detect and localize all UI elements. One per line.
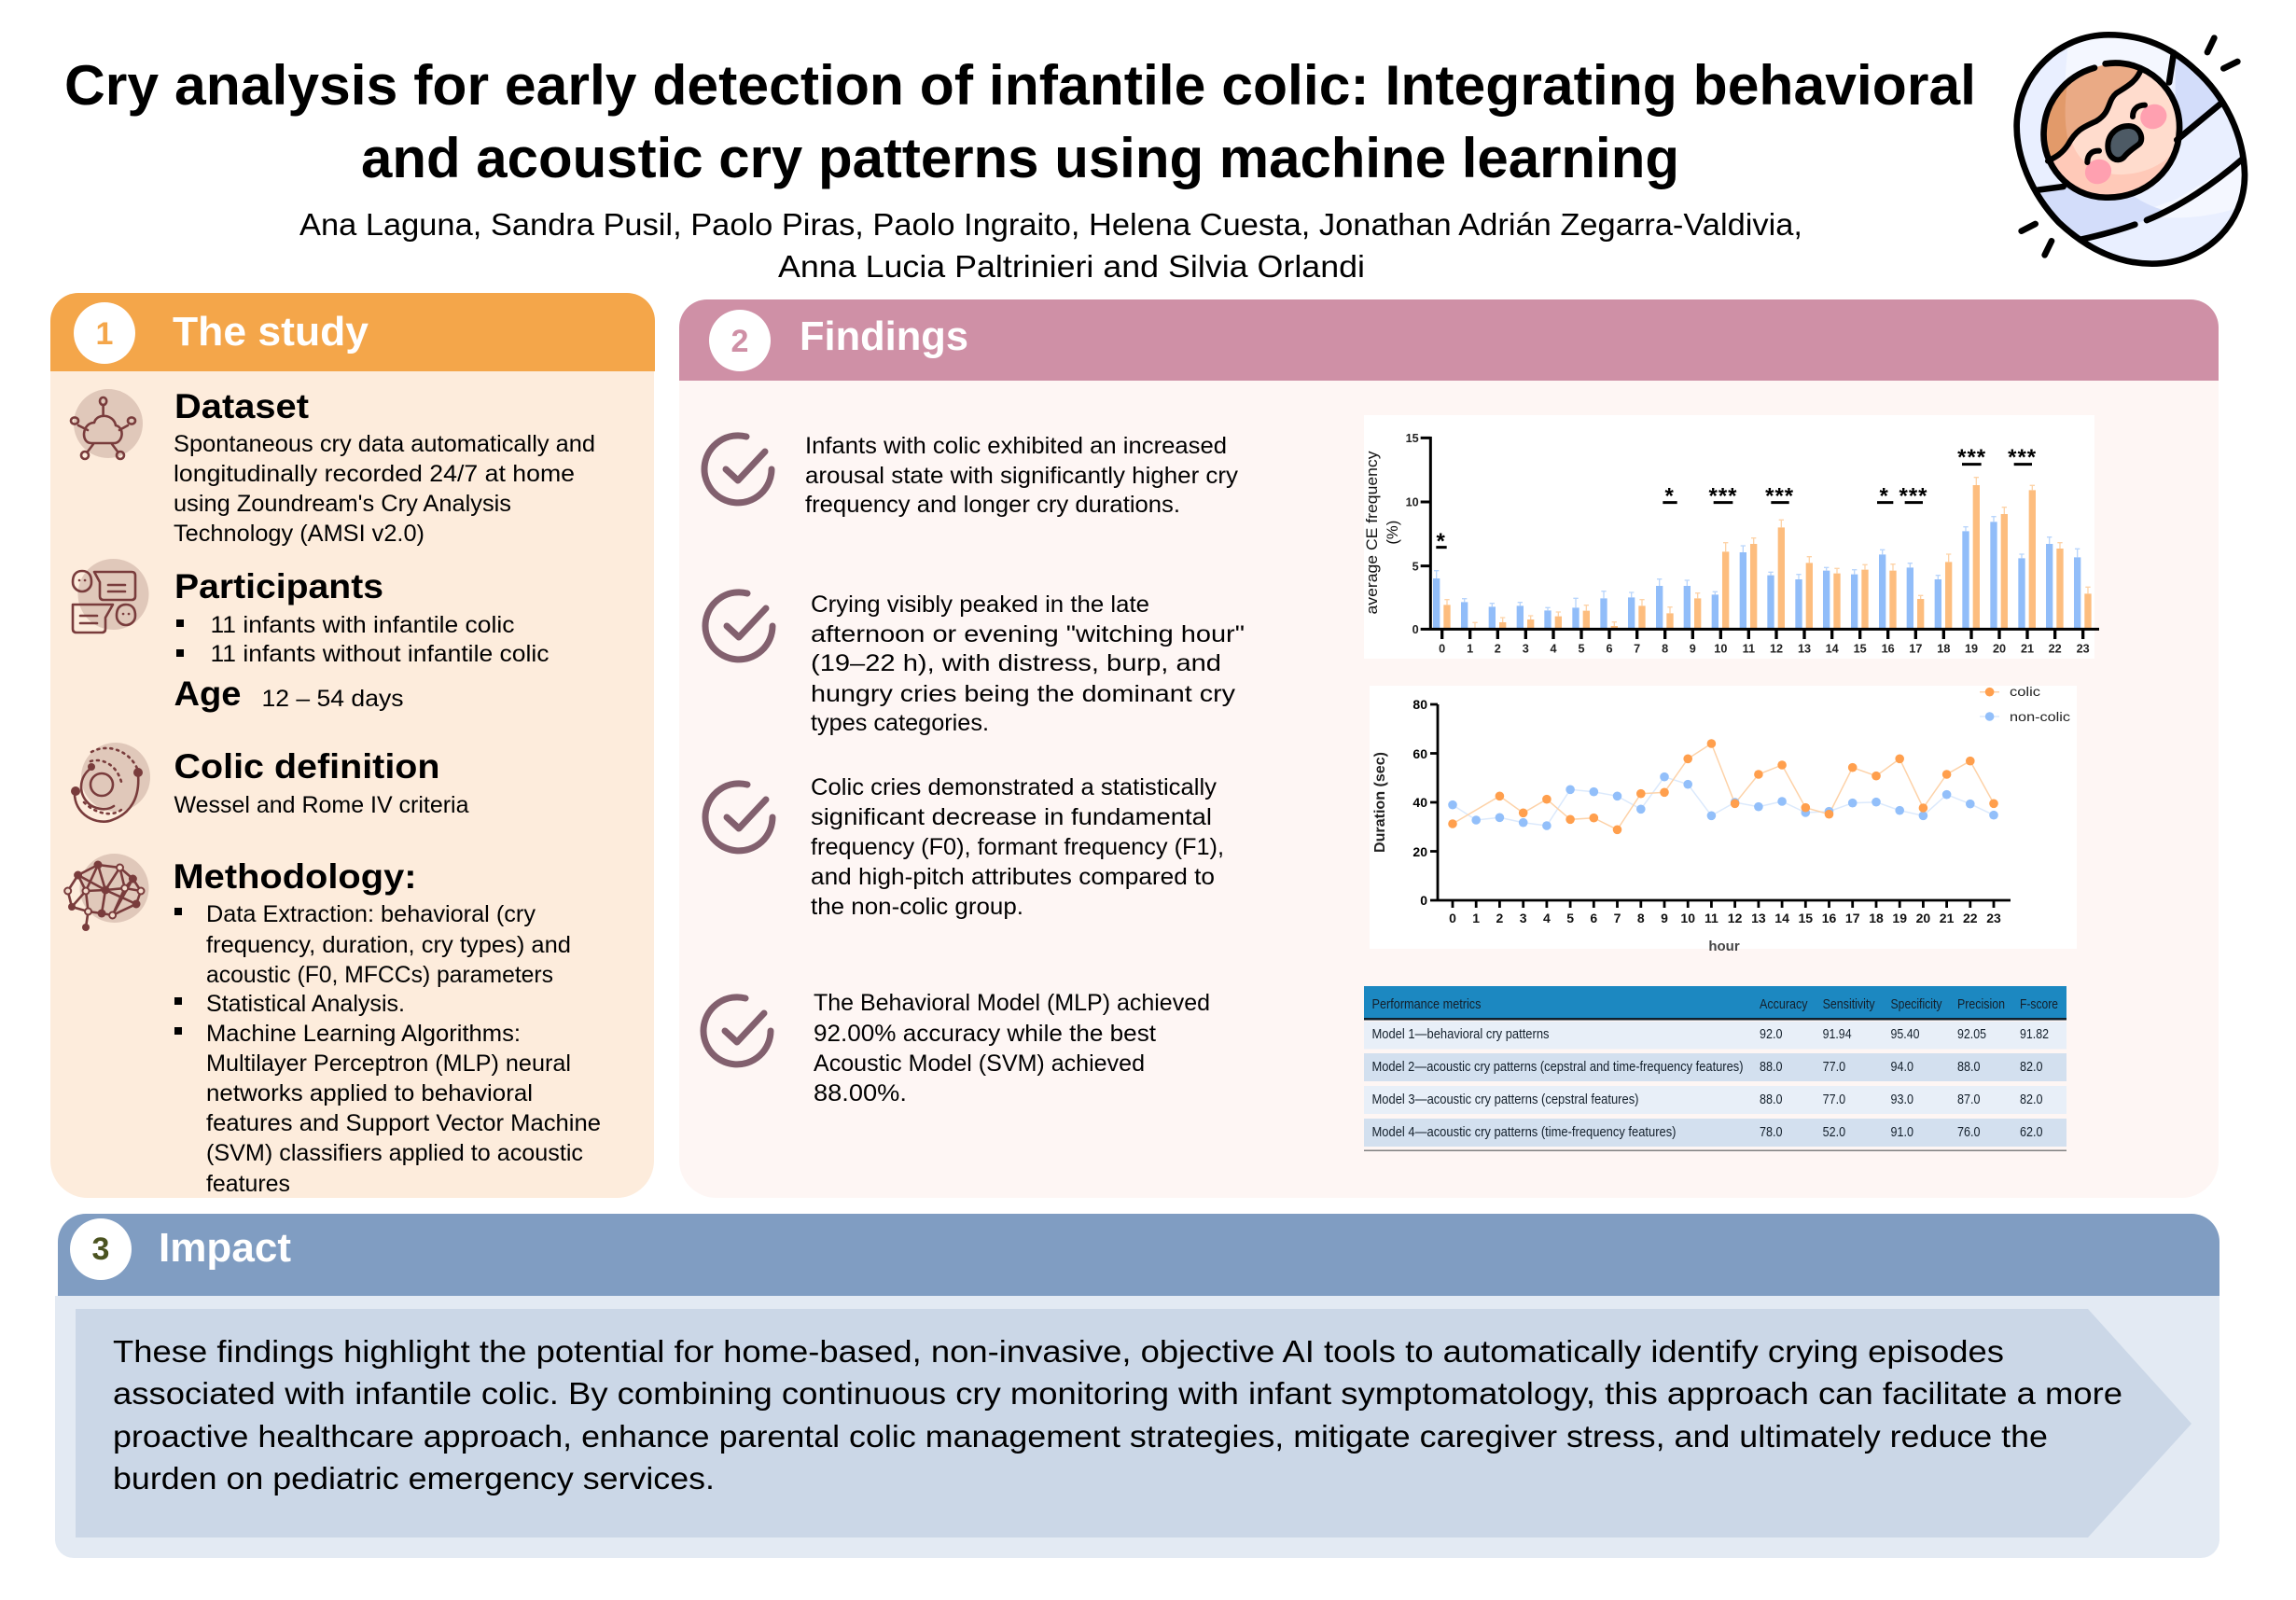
table header: Sensitivity bbox=[1823, 997, 1875, 1012]
text: dataset description: using Zoundream's Cry Analysis bbox=[174, 491, 511, 517]
header: findings: 2 bbox=[731, 324, 748, 359]
icon: check 1 bbox=[704, 436, 772, 503]
list: participants bbox=[176, 612, 549, 667]
text: impact statement: associated with infantile colic. By combining continuous cry monitoring with infant symptomatology, this approach can facilitate a more bbox=[113, 1376, 2122, 1411]
y axis labels: 0 bbox=[1420, 893, 1427, 908]
header: the study: The study bbox=[173, 309, 369, 355]
text: finding 4: Acoustic Model (SVM) achieved bbox=[814, 1050, 1145, 1077]
list: methodology steps: Machine Learning Algorithms: bbox=[206, 1021, 521, 1047]
text: finding 3: the non-colic group. bbox=[811, 894, 1023, 920]
text: finding 2 bbox=[811, 591, 1245, 736]
table row: model 1: 91.94 bbox=[1823, 1027, 1852, 1042]
list: methodology steps: Multilayer Perceptron (MLP) neural bbox=[206, 1050, 571, 1077]
table header: Specificity bbox=[1890, 997, 1942, 1012]
header: the study: 1 bbox=[96, 316, 113, 352]
text: finding 3: significant decrease in fundamental bbox=[811, 804, 1212, 830]
text: finding 3: and high-pitch attributes compared to bbox=[811, 864, 1215, 890]
text: dataset description: Spontaneous cry data automatically and bbox=[174, 431, 595, 457]
header: impact bbox=[58, 1214, 2219, 1296]
x axis labels: 17 bbox=[1845, 911, 1860, 925]
x axis labels: 6 bbox=[1590, 911, 1597, 925]
x axis labels: 21 bbox=[1940, 911, 1955, 925]
header: the study bbox=[50, 293, 655, 371]
x axis labels: 2 bbox=[1496, 911, 1504, 925]
x axis labels: 2 bbox=[1495, 643, 1501, 656]
x axis labels: 19 bbox=[1965, 643, 1978, 656]
table row: model 1: 95.40 bbox=[1890, 1027, 1920, 1042]
x axis labels: 18 bbox=[1869, 911, 1884, 925]
text: dataset description: Technology (AMSI v2.0) bbox=[174, 521, 424, 547]
x axis labels: 15 bbox=[1799, 911, 1813, 925]
table row: model 3: 93.0 bbox=[1890, 1092, 1913, 1107]
authors bbox=[299, 207, 1802, 284]
list: methodology steps: Data Extraction: behavioral (cry bbox=[206, 901, 536, 927]
text: colic criteria: Wessel and Rome IV criteria bbox=[174, 792, 469, 818]
icon: participants bbox=[73, 559, 149, 633]
heading: age: Age bbox=[174, 675, 241, 713]
x axis labels: 21 bbox=[2021, 643, 2034, 656]
x axis labels: 22 bbox=[2049, 643, 2062, 656]
table row: model 4: 76.0 bbox=[1957, 1125, 1980, 1140]
table row: model 1: 92.05 bbox=[1957, 1027, 1986, 1042]
x axis labels: 0 bbox=[1439, 643, 1445, 656]
x axis labels: 16 bbox=[1822, 911, 1836, 925]
x axis labels: 18 bbox=[1937, 643, 1950, 656]
panel: the study bbox=[50, 293, 655, 1198]
y axis labels bbox=[1406, 432, 1419, 636]
x axis labels: 3 bbox=[1520, 911, 1527, 925]
icon: swaddled crying baby bbox=[2017, 35, 2248, 264]
title bbox=[64, 54, 1976, 189]
x axis labels: 5 bbox=[1578, 643, 1585, 656]
y axis labels: 10 bbox=[1406, 496, 1419, 509]
text: finding 3 bbox=[811, 774, 1224, 920]
table header: F-score bbox=[2020, 997, 2058, 1012]
significance markers: *** bbox=[1708, 483, 1738, 508]
heading: methodology: Methodology: bbox=[174, 857, 416, 896]
x axis labels: 3 bbox=[1523, 643, 1529, 656]
x axis labels: 10 bbox=[1714, 643, 1727, 656]
table row: model 3: 82.0 bbox=[2020, 1092, 2043, 1107]
x axis labels: 22 bbox=[1963, 911, 1978, 925]
icon: check 4 bbox=[703, 997, 771, 1064]
table row: model 2: 94.0 bbox=[1890, 1060, 1913, 1075]
table row: model 2: Model 2—acoustic cry patterns (cepstral and time-frequency features) bbox=[1371, 1060, 1743, 1075]
authors: Anna Lucia Paltrinieri and Silvia Orlandi bbox=[778, 249, 1365, 284]
text: finding 4: 92.00% accuracy while the best bbox=[814, 1021, 1156, 1047]
list: methodology steps: Statistical Analysis. bbox=[206, 991, 405, 1017]
table row: model 4: 52.0 bbox=[1823, 1125, 1845, 1140]
table row: model 3: 77.0 bbox=[1823, 1092, 1845, 1107]
x axis title: hour bbox=[1708, 939, 1740, 954]
title: and acoustic cry patterns using machine learning bbox=[361, 127, 1679, 189]
x axis labels: 8 bbox=[1662, 643, 1668, 656]
significance markers: * bbox=[1879, 483, 1889, 508]
x axis labels: 6 bbox=[1606, 643, 1613, 656]
y axis title: (%) bbox=[1384, 521, 1401, 545]
list: methodology steps bbox=[174, 901, 601, 1197]
y axis labels: 20 bbox=[1412, 844, 1427, 859]
list: methodology steps: features bbox=[206, 1171, 290, 1197]
header: findings bbox=[679, 299, 2219, 381]
header: impact: Impact bbox=[159, 1225, 291, 1271]
significance markers: *** bbox=[1899, 483, 1928, 508]
x axis labels: 20 bbox=[1916, 911, 1930, 925]
y axis labels: 80 bbox=[1412, 697, 1427, 712]
x axis labels: 20 bbox=[1993, 643, 2006, 656]
x axis labels: 10 bbox=[1680, 911, 1695, 925]
text: finding 3: Colic cries demonstrated a statistically bbox=[811, 774, 1217, 800]
table row: model 1 bbox=[1364, 1022, 2066, 1049]
list: methodology steps: networks applied to behavioral bbox=[206, 1080, 533, 1106]
x axis labels: 9 bbox=[1661, 911, 1668, 925]
line: colic bbox=[1453, 744, 1994, 829]
x axis labels: 7 bbox=[1634, 643, 1640, 656]
text: finding 2: types categories. bbox=[811, 710, 989, 736]
panel: impact bbox=[55, 1214, 2219, 1558]
icon: check 2 bbox=[705, 592, 772, 660]
x axis labels: 9 bbox=[1690, 643, 1696, 656]
table row: model 2: 88.0 bbox=[1957, 1060, 1980, 1075]
error bars: colic bbox=[1444, 478, 2091, 629]
significance markers: *** bbox=[1957, 445, 1986, 470]
table row: model 1: 92.0 bbox=[1760, 1027, 1782, 1042]
table row: model 3: Model 3—acoustic cry patterns (cepstral features) bbox=[1371, 1092, 1638, 1107]
table header: Precision bbox=[1957, 997, 2005, 1012]
legend: colic bbox=[2010, 684, 2040, 699]
x axis labels: 14 bbox=[1774, 911, 1789, 925]
icon: dataset cloud network bbox=[71, 389, 143, 459]
legend: non-colic bbox=[2010, 709, 2070, 724]
y axis labels: 40 bbox=[1412, 795, 1427, 810]
x axis labels: 7 bbox=[1614, 911, 1621, 925]
text: finding 1: Infants with colic exhibited an increased bbox=[805, 433, 1227, 459]
table row: model 3 bbox=[1364, 1086, 2066, 1114]
bars: non-colic bbox=[1433, 522, 2080, 629]
table row: model 1: Model 1—behavioral cry patterns bbox=[1371, 1027, 1549, 1042]
markers: colic bbox=[1448, 739, 1998, 834]
y axis labels: 60 bbox=[1412, 746, 1427, 761]
table row: model 4: 91.0 bbox=[1890, 1125, 1913, 1140]
x axis labels: 13 bbox=[1798, 643, 1811, 656]
heading: participants: Participants bbox=[174, 567, 383, 605]
x axis labels: 5 bbox=[1566, 911, 1574, 925]
list: methodology steps: frequency, duration, cry types) and bbox=[206, 932, 571, 958]
table row: model 4: Model 4—acoustic cry patterns (time-frequency features) bbox=[1371, 1125, 1676, 1140]
x axis labels: 1 bbox=[1467, 643, 1473, 656]
y axis title bbox=[1363, 451, 1401, 614]
authors: Ana Laguna, Sandra Pusil, Paolo Piras, Paolo Ingraito, Helena Cuesta, Jonathan Adrián Zegarra-Valdivia, bbox=[299, 207, 1802, 242]
x axis labels: 11 bbox=[1743, 643, 1755, 656]
table row: model 1: 91.82 bbox=[2020, 1027, 2049, 1042]
y axis labels: 0 bbox=[1412, 623, 1419, 636]
table row: model 2: 82.0 bbox=[2020, 1060, 2043, 1075]
line: non-colic bbox=[1453, 777, 1994, 826]
bars: colic bbox=[1443, 485, 2092, 629]
y axis labels: 15 bbox=[1406, 432, 1419, 445]
text: finding 1: frequency and longer cry durations. bbox=[805, 492, 1180, 518]
table row: model 2 bbox=[1364, 1053, 2066, 1081]
text: impact statement: These findings highlight the potential for home-based, non-invasive, objective AI tools to automatically identify crying episodes bbox=[113, 1334, 2004, 1369]
significance markers: *** bbox=[2008, 445, 2037, 470]
table row: model 4: 78.0 bbox=[1760, 1125, 1782, 1140]
panel: findings bbox=[679, 299, 2219, 1198]
x axis labels: 23 bbox=[1986, 911, 2001, 925]
text: finding 2: hungry cries being the dominant cry bbox=[811, 681, 1236, 707]
icon: brain network bbox=[64, 854, 149, 931]
text: finding 4 bbox=[814, 990, 1210, 1106]
text: finding 1 bbox=[805, 433, 1239, 518]
title: Cry analysis for early detection of infantile colic: Integrating behavioral bbox=[64, 54, 1976, 117]
x axis labels: 17 bbox=[1909, 643, 1922, 656]
table header bbox=[1364, 986, 2066, 1021]
text: finding 3: frequency (F0), formant frequency (F1), bbox=[811, 834, 1224, 860]
text: finding 2: (19–22 h), with distress, burp, and bbox=[811, 650, 1221, 676]
text: finding 1: arousal state with significantly higher cry bbox=[805, 463, 1239, 489]
x axis labels: 13 bbox=[1751, 911, 1766, 925]
x axis labels: 8 bbox=[1637, 911, 1645, 925]
axes bbox=[1430, 704, 2011, 908]
table row: model 3: 88.0 bbox=[1760, 1092, 1782, 1107]
heading: dataset: Dataset bbox=[174, 387, 309, 425]
markers: non-colic bbox=[1448, 772, 1998, 830]
heading: colic definition: Colic definition bbox=[174, 747, 440, 786]
list: methodology steps: (SVM) classifiers applied to acoustic bbox=[206, 1140, 583, 1166]
significance markers: *** bbox=[1765, 483, 1794, 508]
table row: model 2: 77.0 bbox=[1823, 1060, 1845, 1075]
text: impact statement bbox=[113, 1334, 2122, 1496]
table row: model 2: 88.0 bbox=[1760, 1060, 1782, 1075]
x axis labels: 15 bbox=[1854, 643, 1867, 656]
list: participants: 11 infants with infantile colic bbox=[211, 612, 515, 638]
axes bbox=[1421, 437, 2099, 629]
error bars: non-colic bbox=[1434, 517, 2080, 610]
table header: Performance metrics bbox=[1371, 997, 1482, 1012]
text: finding 4: The Behavioral Model (MLP) achieved bbox=[814, 990, 1210, 1016]
y axis title: Duration (sec) bbox=[1372, 752, 1388, 853]
x axis labels: 16 bbox=[1882, 643, 1895, 656]
list: methodology steps: acoustic (F0, MFCCs) parameters bbox=[206, 962, 553, 988]
significance markers: * bbox=[1664, 483, 1675, 508]
text: dataset description: longitudinally recorded 24/7 at home bbox=[174, 461, 575, 487]
table row: model 4 bbox=[1364, 1119, 2066, 1147]
x axis labels bbox=[1439, 643, 2090, 656]
header: impact: 3 bbox=[92, 1231, 109, 1267]
line chart: cry duration by hour bbox=[1370, 684, 2077, 954]
text: finding 4: 88.00%. bbox=[814, 1080, 907, 1106]
x axis labels: 4 bbox=[1550, 643, 1557, 656]
significance markers bbox=[1436, 445, 2037, 554]
text: finding 2: Crying visibly peaked in the late bbox=[811, 591, 1149, 618]
x axis labels: 12 bbox=[1728, 911, 1743, 925]
x axis labels: 12 bbox=[1770, 643, 1783, 656]
list: methodology steps: features and Support Vector Machine bbox=[206, 1110, 601, 1136]
icon: colic definition cycle bbox=[71, 743, 150, 822]
text: impact statement: burden on pediatric emergency services. bbox=[113, 1461, 715, 1496]
bar chart: average CE frequency by hour bbox=[1363, 415, 2099, 659]
x axis labels: 19 bbox=[1892, 911, 1907, 925]
text: impact statement: proactive healthcare approach, enhance parental colic management strategies, mitigate caregiver stress, and ultimately reduce the bbox=[113, 1419, 2048, 1454]
x axis labels: 14 bbox=[1826, 643, 1839, 656]
y axis labels: 5 bbox=[1412, 560, 1419, 573]
legend bbox=[1980, 684, 2070, 724]
y axis labels bbox=[1412, 697, 1427, 908]
text: dataset description bbox=[174, 431, 595, 547]
header: findings: Findings bbox=[800, 313, 968, 359]
arrow banner bbox=[76, 1309, 2192, 1537]
text: age range: 12 – 54 days bbox=[261, 686, 403, 712]
list: participants: 11 infants without infantile colic bbox=[211, 641, 549, 667]
table: performance metrics bbox=[1364, 986, 2066, 1151]
table header: Accuracy bbox=[1760, 997, 1808, 1012]
x axis labels: 1 bbox=[1472, 911, 1480, 925]
x axis labels: 0 bbox=[1449, 911, 1456, 925]
x axis labels bbox=[1449, 911, 2001, 925]
x axis labels: 4 bbox=[1543, 911, 1551, 925]
significance markers: * bbox=[1436, 529, 1446, 554]
icon: check 3 bbox=[705, 784, 772, 851]
text: finding 2: afternoon or evening "witching hour" bbox=[811, 621, 1245, 647]
x axis labels: 11 bbox=[1705, 911, 1719, 925]
y axis title: average CE frequency bbox=[1363, 451, 1381, 614]
x axis labels: 23 bbox=[2077, 643, 2090, 656]
table row: model 3: 87.0 bbox=[1957, 1092, 1980, 1107]
table row: model 4: 62.0 bbox=[2020, 1125, 2043, 1140]
